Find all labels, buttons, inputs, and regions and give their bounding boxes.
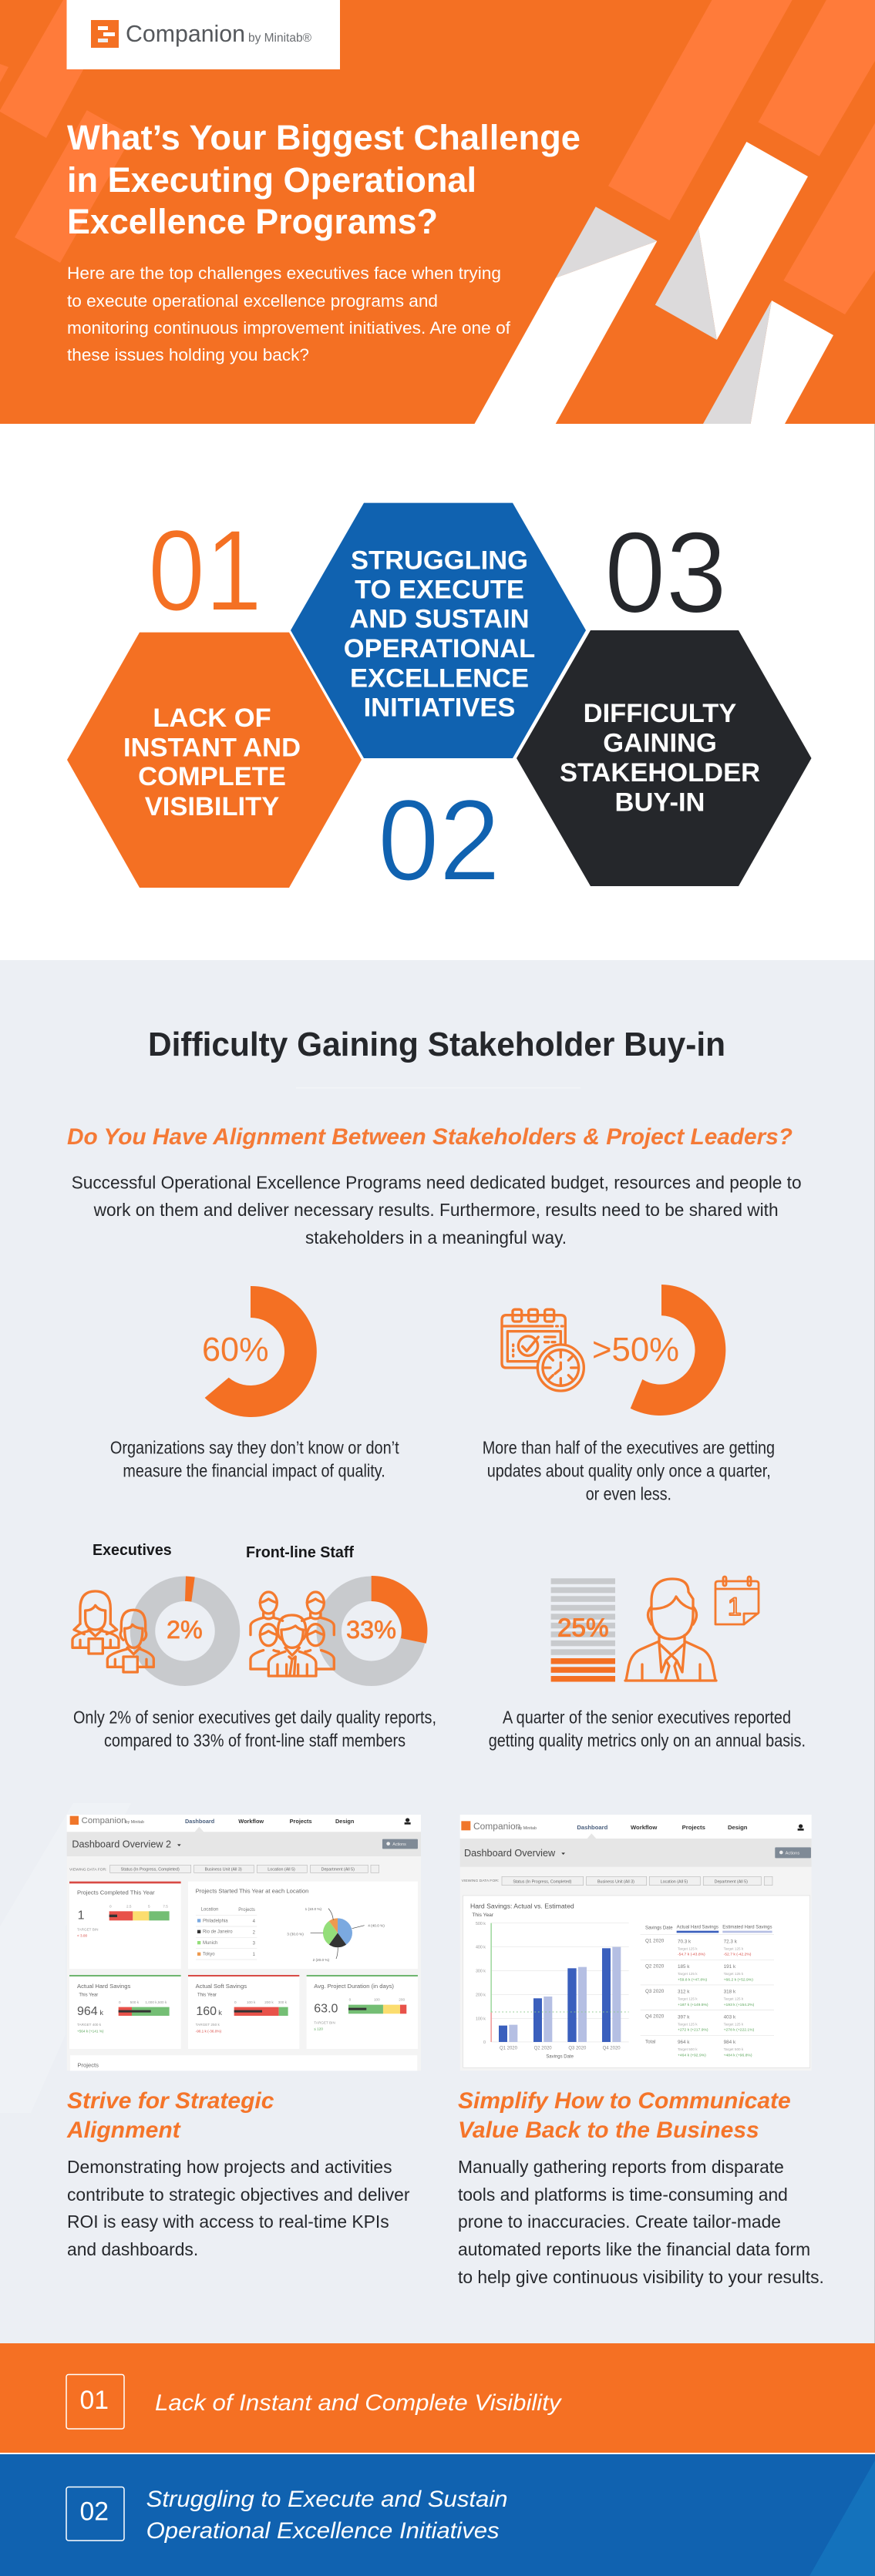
screenshot: hard savings dashboard: Actions [786,1852,799,1856]
footer band 01: 01 [80,2386,109,2415]
screenshot: dashboard overview 2: TARGET BIN [314,2021,335,2025]
bar stack: 25%: 25% [557,1613,609,1641]
screenshot: dashboard overview 2: Projects [77,2061,99,2068]
screenshot: hard savings dashboard: 500 k [476,1922,486,1926]
screenshot: hard savings dashboard: Target 125 k [678,1946,698,1950]
screenshot: dashboard overview 2: Location (All 5) [268,1868,295,1872]
hexagon 02: struggling to execute: INITIATIVES [364,693,515,722]
column heading: communicate value: Simplify How to Communicate [458,2088,791,2114]
screenshot: dashboard overview 2: 0 [119,2000,121,2004]
screenshot: hard savings dashboard: 191 k [724,1964,736,1970]
screenshot: dashboard overview 2: 7.5 [163,1905,168,1909]
screenshot: dashboard overview 2: 100 [374,1998,380,2002]
column heading: strategic alignment: Strive for Strategic [67,2088,274,2114]
screenshot: hard savings dashboard: +464 k (+92.9%) [678,2053,706,2057]
icon: front-line staff [251,1592,334,1676]
hexagon 01: lack of visibility [67,505,362,888]
screenshot: dashboard overview 2: 300 k [278,2000,288,2004]
hexagon 02: struggling to execute [291,503,586,905]
title: Excellence Programs? [67,202,438,241]
screenshot: dashboard overview 2: Location [201,1907,218,1912]
text: 60% caption: measure the financial impact of quality. [123,1461,385,1481]
screenshot: dashboard overview 2: k [99,2009,103,2017]
text: greater than 50% caption: More than half of the executives are getting [483,1438,775,1458]
screenshot: hard savings dashboard: 70.3 k [678,1939,692,1944]
screenshot: hard savings dashboard: Actual Hard Savings [677,1926,719,1930]
text: 2% vs 33% caption: Only 2% of senior executives get daily quality reports, [73,1708,436,1728]
column heading: strategic alignment: Alignment [66,2118,182,2143]
footer band 02: 02 [80,2497,109,2527]
screenshot: hard savings dashboard: 312 k [678,1990,690,1995]
hexagon 02: struggling to execute: EXCELLENCE [350,663,529,693]
hexagon 03: difficulty gaining buy-in [517,507,811,886]
screenshot: dashboard overview 2: Dashboard [185,1818,214,1825]
screenshot: hard savings dashboard: +187 k (+149.5%) [678,2003,708,2007]
screenshot: dashboard overview 2: ≤ 120 [314,2027,323,2031]
screenshot: dashboard overview 2: VIEWING DATA FOR: [69,1867,107,1872]
text: greater than 50% caption [483,1438,775,1504]
screenshot: dashboard overview 2: Munich [203,1941,217,1946]
hexagon 02: struggling to execute: TO EXECUTE [355,576,524,605]
text: 60% caption [110,1438,399,1481]
donut chart: 60%: 60% [202,1331,268,1369]
screenshot: dashboard overview 2: by Minitab [126,1820,144,1825]
hexagon 01: lack of visibility: LACK OF [153,704,271,733]
screenshot: dashboard overview 2: 500 k [130,2000,140,2004]
screenshot: hard savings dashboard: +193 k (+154.2%) [724,2003,755,2007]
footer band 02: Struggling to Execute and Sustain [146,2487,508,2512]
text: 25% caption: A quarter of the senior executives reported [503,1708,791,1728]
screenshot: hard savings dashboard: VIEWING DATA FOR: [462,1879,499,1883]
column text: strategic alignment: and dashboards. [67,2239,198,2259]
screenshot: hard savings dashboard: 300 k [476,1970,486,1974]
footer band 02: Operational Excellence Initiatives [146,2518,500,2544]
text: 25% caption: getting quality metrics only on an annual basis. [489,1731,806,1751]
screenshot: dashboard overview 2: Status (In Progress, Completed) [121,1868,180,1872]
donut chart: executives 2%: 2% [167,1616,203,1644]
intro paragraph [67,264,511,364]
donut chart: greater than 50% [592,1285,725,1416]
column heading: communicate value: Value Back to the Business [458,2118,759,2143]
icon: calendar and clock [502,1309,584,1391]
hexagon 02: struggling to execute: OPERATIONAL [344,634,535,663]
text: greater than 50% caption: or even less. [586,1484,671,1504]
donut chart: 60% [202,1286,317,1417]
title [67,118,581,241]
hexagon 01: lack of visibility: VISIBILITY [145,792,279,821]
screenshot: hard savings dashboard: Target 125 k [678,1972,698,1976]
screenshot: hard savings dashboard: Status (In Progress, Completed) [513,1879,572,1884]
screenshot: dashboard overview 2: Workflow [238,1818,264,1825]
screenshot: hard savings dashboard: Q1 2020 [500,2046,518,2050]
screenshot: hard savings dashboard: +484 k (+96.8%) [724,2053,752,2057]
screenshot: dashboard overview 2: Avg. Project Duration (in days) [314,1983,394,1990]
screenshot: dashboard overview 2: 3 (30.0 %) [287,1932,304,1936]
footer band 01 [0,2343,875,2453]
column text: communicate value [458,2157,824,2287]
title: What’s Your Biggest Challenge [67,118,581,157]
logo: by Minitab® [248,32,312,45]
screenshot: hard savings dashboard: Q2 2020 [645,1963,665,1969]
column text: strategic alignment: Demonstrating how projects and activities [67,2157,392,2177]
screenshot: hard savings dashboard: 200 k [476,1993,486,1997]
screenshot: hard savings dashboard: 72.3 k [724,1939,738,1944]
screenshot: hard savings dashboard: 984 k [724,2040,736,2045]
column heading: communicate value [458,2088,791,2143]
screenshot: dashboard overview 2: Department (All 5) [321,1868,355,1872]
screenshot: hard savings dashboard: Estimated Hard Savings [722,1926,772,1930]
screenshot: hard savings dashboard: Total [645,2039,655,2044]
text: 2% vs 33% caption [73,1708,436,1751]
screenshot: dashboard overview 2: Projects Completed This Year [77,1889,155,1896]
icon: businessman [625,1579,716,1681]
screenshot: dashboard overview 2: 3 [253,1942,256,1946]
hexagon 03: difficulty gaining buy-in: DIFFICULTY [584,699,736,728]
screenshot: hard savings dashboard: Q2 2020 [534,2046,552,2050]
text: greater than 50% caption: updates about quality only once a quarter, [487,1461,771,1481]
screenshot: dashboard overview 2: 100 k [247,2000,256,2004]
donut chart: greater than 50%: >50% [592,1331,679,1369]
section intro text: Successful Operational Excellence Programs need dedicated budget, resources and people to [72,1173,802,1193]
screenshot: hard savings dashboard: +66.2 k (+52.9%) [724,1977,753,1982]
screenshot: dashboard overview 2: 4 [253,1919,256,1924]
screenshot: hard savings dashboard: Companion [473,1821,520,1832]
screenshot: hard savings dashboard: 0 [483,2040,486,2045]
section intro text: stakeholders in a meaningful way. [305,1228,567,1248]
screenshot: dashboard overview 2: TARGET 400 k [77,2023,102,2027]
screenshot: dashboard overview 2: This Year [197,1993,217,1997]
screenshot: hard savings dashboard: by Minitab [518,1826,537,1831]
screenshot: hard savings dashboard: Target 125 k [678,2022,698,2026]
screenshot: hard savings dashboard: Q4 2020 [645,2014,665,2020]
column heading: strategic alignment [66,2088,274,2143]
screenshot: dashboard overview 2: 964 [77,2005,98,2018]
screenshot: dashboard overview 2: -90.1 k (-36.0%) [196,2029,221,2033]
screenshot: dashboard overview 2: TARGET BIN [77,1927,99,1931]
donut chart: executives 2% [143,1577,227,1674]
hexagon 01: lack of visibility: 01 [148,505,262,635]
section intro text [72,1173,802,1248]
screenshot: hard savings dashboard: Savings Date [546,2054,574,2059]
screenshot: dashboard overview 2: Actions [392,1842,406,1847]
title: in Executing Operational [67,160,476,200]
screenshot: hard savings dashboard: Target 500 k [724,2047,744,2051]
screenshot: hard savings dashboard: Workflow [631,1824,657,1831]
screenshot: dashboard overview 2: 200 k [264,2000,274,2004]
screenshot: hard savings dashboard: -54.7 k (-43.8%) [678,1953,705,1957]
screenshot: dashboard overview 2: k [218,2009,222,2017]
screenshot: dashboard overview 2 [67,1815,421,2071]
screenshot: hard savings dashboard: Q4 2020 [603,2046,621,2050]
screenshot: dashboard overview 2: 4 (40.0 %) [368,1924,385,1928]
section intro text: work on them and deliver necessary results. Furthermore, results need to be shared with [93,1200,779,1220]
icon: calendar page [715,1577,759,1624]
icon: calendar page: 1 [728,1593,742,1620]
screenshot: hard savings dashboard: Target 125 k [724,1946,744,1950]
text: 25% caption [489,1708,806,1751]
screenshot: dashboard overview 2: 2.5 [126,1905,132,1909]
screenshot: hard savings dashboard: Location (All 5) [661,1879,688,1884]
screenshot: dashboard overview 2: 0 [234,2000,237,2004]
screenshot: hard savings dashboard: Savings Date [645,1926,673,1931]
screenshot: hard savings dashboard: Target 500 k [678,2047,698,2051]
screenshot: hard savings dashboard: Target 125 k [724,2022,744,2026]
screenshot: hard savings dashboard: Dashboard [577,1824,608,1831]
screenshot: hard savings dashboard: +278 k (+222.1%) [724,2028,755,2033]
logo [66,0,340,69]
screenshot: dashboard overview 2: 160 [196,2005,217,2018]
screenshot: dashboard overview 2: Tokyo [203,1952,215,1956]
footer band 02 [0,2454,875,2576]
column text: strategic alignment [67,2157,410,2259]
screenshot: hard savings dashboard: Department (All 5) [715,1879,748,1884]
screenshot: hard savings dashboard: +272 k (+217.9%) [678,2028,708,2033]
screenshot: hard savings dashboard [460,1815,812,2071]
text: 60% caption: Organizations say they don’t know or don’t [110,1438,399,1458]
screenshot: dashboard overview 2: This Year [79,1993,98,1997]
hexagon 02: struggling to execute: 02 [378,775,500,905]
hexagon 03: difficulty gaining buy-in: 03 [604,507,727,636]
screenshot: dashboard overview 2: TARGET 250 k [196,2023,220,2027]
screenshot: hard savings dashboard: +59.8 k (+47.8%) [678,1977,708,1982]
panel: stakeholder buy-in background [0,424,875,2344]
screenshot: hard savings dashboard: Q3 2020 [645,1989,665,1994]
hexagon 02: struggling to execute: STRUGGLING [351,546,528,575]
hexagon 03: difficulty gaining buy-in: BUY-IN [615,788,705,818]
screenshot: dashboard overview 2: 0 [109,1905,112,1909]
column text: communicate value: automated reports like the financial data form [458,2239,810,2259]
intro paragraph: these issues holding you back? [67,345,309,364]
screenshot: hard savings dashboard: Projects [682,1824,705,1831]
orange subheading: Do You Have Alignment Between Stakeholders & Project Leaders? [67,1124,793,1150]
screenshot: dashboard overview 2: 2 (20.0 %) [313,1958,330,1962]
screenshot: hard savings dashboard: Hard Savings: Actual vs. Estimated [470,1903,574,1910]
screenshot: dashboard overview 2: Dashboard Overview 2 [72,1839,171,1849]
hexagon 03: difficulty gaining buy-in: GAINING [603,729,717,758]
screenshot: dashboard overview 2: Philadelphia [203,1919,228,1923]
screenshot: dashboard overview 2: 2 [253,1930,256,1935]
screenshot: dashboard overview 2: 5 [148,1905,150,1909]
screenshot: dashboard overview 2: 1 [253,1953,256,1957]
screenshot: hard savings dashboard: 400 k [476,1946,486,1950]
screenshot: hard savings dashboard: 964 k [678,2040,690,2045]
screenshot: dashboard overview 2: 1,000 k,500 k [145,2000,167,2004]
screenshot: hard savings dashboard: 185 k [678,1964,690,1970]
screenshot: hard savings dashboard: 403 k [724,2014,736,2020]
screenshot: dashboard overview 2: 1 [78,1909,85,1923]
icon: executives [72,1591,153,1672]
screenshot: dashboard overview 2: 0 [349,1998,352,2002]
hexagon 01: lack of visibility: COMPLETE [138,762,286,791]
screenshot: hard savings dashboard: Dashboard Overview [464,1848,556,1859]
screenshot: dashboard overview 2: Design [335,1818,355,1825]
screenshot: hard savings dashboard: 397 k [678,2014,690,2020]
column text: communicate value: prone to inaccuracies. Create tailor-made [458,2212,781,2232]
logo: Companion [126,20,245,47]
footer band 01: Lack of Instant and Complete Visibility [155,2390,563,2416]
hexagon 02: struggling to execute: AND SUSTAIN [349,605,530,634]
screenshot: hard savings dashboard: Target 125 k [724,1972,744,1976]
column text: communicate value: tools and platforms is time-consuming and [458,2185,788,2205]
screenshot: dashboard overview 2: Projects [238,1908,255,1913]
screenshot: dashboard overview 2: Projects Started This Year at each Location [196,1887,308,1894]
column text: strategic alignment: ROI is easy with access to real-time KPIs [67,2212,389,2232]
screenshot: dashboard overview 2: Business Unit (All 3) [205,1868,242,1872]
label: front-line staff: Front-line Staff [246,1544,354,1561]
intro paragraph: monitoring continuous improvement initiatives. Are one of [67,318,511,338]
hexagon 01: lack of visibility: INSTANT AND [123,734,301,763]
screenshot: dashboard overview 2: 1 (10.0 %) [305,1907,322,1911]
donut chart: front-line staff 33% [329,1576,428,1674]
screenshot: dashboard overview 2: Companion [82,1816,126,1825]
screenshot: hard savings dashboard: 100 k [476,2017,486,2021]
screenshot: dashboard overview 2: Projects [290,1818,312,1825]
screenshot: hard savings dashboard: Q1 2020 [645,1939,665,1944]
screenshot: hard savings dashboard: This Year [472,1913,494,1918]
column text: strategic alignment: contribute to strategic objectives and deliver [67,2185,410,2205]
text: 2% vs 33% caption: compared to 33% of front-line staff members [104,1731,406,1751]
column text: communicate value: Manually gathering reports from disparate [458,2157,784,2177]
screenshot: dashboard overview 2: Rio de Janeiro [203,1930,233,1935]
intro paragraph: Here are the top challenges executives face when trying [67,264,501,283]
screenshot: dashboard overview 2: 63.0 [314,2003,338,2016]
intro paragraph: to execute operational excellence programs and [67,291,438,311]
screenshot: hard savings dashboard: Target 125 k [678,1997,698,2001]
screenshot: dashboard overview 2: Actual Hard Savings [77,1983,131,1990]
section heading: Difficulty Gaining Stakeholder Buy-in [148,1026,725,1063]
label: executives: Executives [93,1542,172,1559]
donut chart: front-line staff 33%: 33% [346,1616,396,1644]
screenshot: dashboard overview 2: Actual Soft Savings [196,1983,247,1990]
screenshot: hard savings dashboard: Target 125 k [724,1997,744,2001]
screenshot: hard savings dashboard: -52.7 k (-42.2%) [724,1953,752,1957]
screenshot: hard savings dashboard: Q3 2020 [568,2046,587,2050]
bar stack: 25% [551,1578,615,1681]
screenshot: hard savings dashboard: Design [728,1824,748,1831]
hero panel [0,0,875,424]
column text: communicate value: to help give continuous visibility to your results. [458,2267,824,2287]
screenshot: hard savings dashboard: Business Unit (All 3) [597,1879,634,1884]
screenshot: dashboard overview 2: < 3.00 [77,1934,87,1938]
screenshot: dashboard overview 2: 200 [399,1998,405,2002]
hexagon 03: difficulty gaining buy-in: STAKEHOLDER [560,758,760,788]
screenshot: dashboard overview 2: +564 k (+141 %) [77,2029,104,2033]
screenshot: hard savings dashboard: 318 k [724,1990,736,1995]
